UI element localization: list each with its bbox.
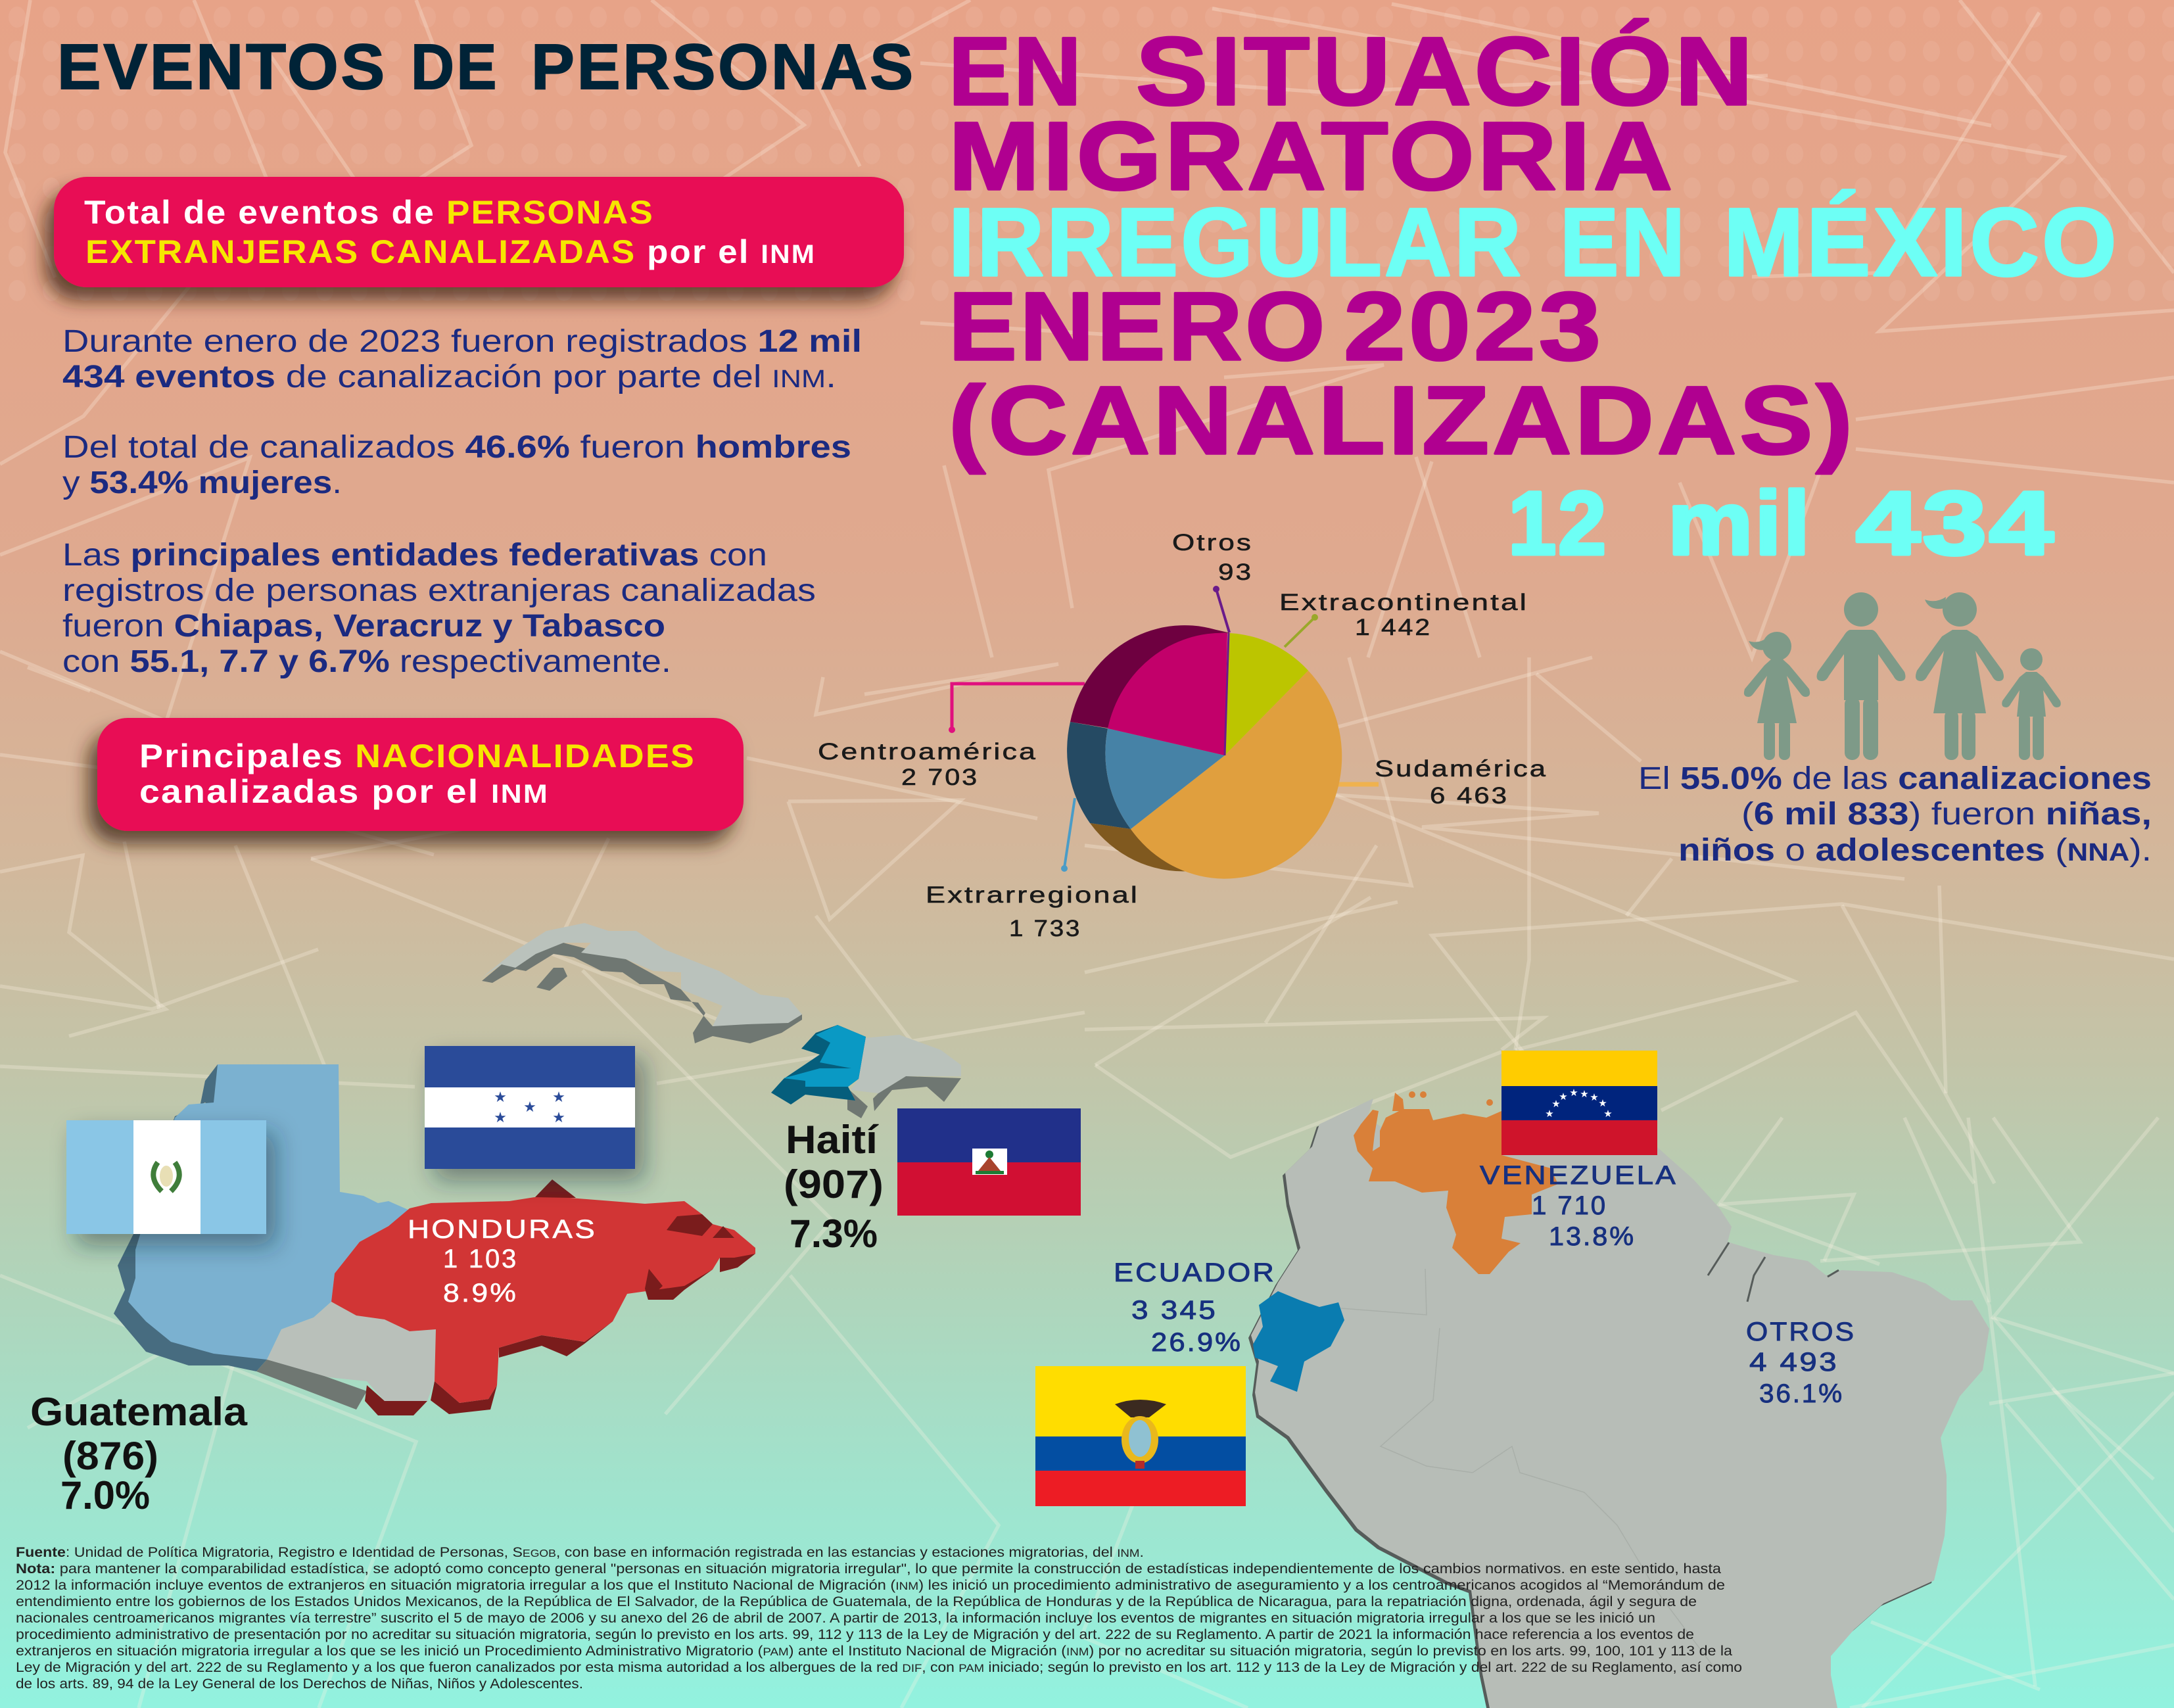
footnote: fuente y nota: Ley de Migración y del art. 222 de su Reglamento y a los que fueron canalizados por esta misma autoridad a los albergues de la red DIF, con PAM iniciado; según lo previsto en los art. 112 y 113 de la Ley de Migración y del art. 222 de su Reglamento, así como [16, 1660, 1742, 1675]
stars: ★ [494, 1089, 507, 1105]
title line: irregular en México: IRREGULAR [949, 189, 1524, 297]
label: Extracontinental: Extracontinental [1279, 590, 1528, 615]
leader lines [949, 586, 1379, 872]
label: Otros: OTROS [1746, 1317, 1856, 1346]
slice: Extracontinental [1225, 633, 1308, 755]
slice: Centroamérica [1108, 633, 1227, 755]
emblem: Ecuador [1115, 1400, 1166, 1469]
stars: ★ [1598, 1098, 1607, 1109]
label: Ecuador: ECUADOR [1114, 1258, 1276, 1287]
stars: ★ [1545, 1108, 1554, 1120]
text block: NNA: El 55.0% de las canalizaciones [1638, 761, 2152, 796]
pill background [54, 177, 904, 287]
label: Ecuador [1114, 1258, 1276, 1357]
title line: en situación [949, 18, 1756, 126]
paragraph: entidades federativas: con 55.1, 7.7 y 6.7% respectivamente. [62, 644, 671, 679]
map: El Salvador [256, 1302, 436, 1415]
label: Guatemala: Guatemala [30, 1390, 248, 1434]
flag: Honduras [425, 1046, 635, 1169]
label: Honduras: 1 103 [443, 1245, 518, 1273]
label: Venezuela: VENEZUELA [1480, 1161, 1678, 1190]
paragraph: registros: 434 eventos de canalización por parte del INM . [62, 360, 836, 394]
label: Haití: Haití [786, 1118, 879, 1162]
footnote: fuente y nota: nacionales centroamericanos migrantes vía terrestre” suscrito el 5 de mayo de 2006 y su anexo del 26 de abril de 2007. A partir de 2013, la información incluye los eventos de migrantes en situación migratoria irregular a los que se les inició un [16, 1611, 1655, 1626]
label: Centroamérica: 2 703 [901, 765, 979, 790]
slice: Sudamérica [1131, 671, 1342, 879]
map: Honduras [331, 1179, 755, 1414]
map: Venezuela [1354, 1091, 1558, 1274]
footnote: fuente y nota: extranjeros en situación migratoria irregular a los que se les inició un Procedimiento Administrativo Migratorio ( PAM) ante el Instituto Nacional de Migración ( INM) por no acreditar su situación migratoria, según lo previsto en los arts. 99, 100, 101 y 113 de la [16, 1644, 1732, 1659]
total figure: mil [1668, 473, 1812, 574]
footnote: fuente y nota: Nota: para mantener la comparabilidad estadística, se adoptó como concepto general "personas en situación migratoria irregular", lo que permite la construcción de estadísticas independientemente de los cambios normativos. en este sentido, hasta [16, 1561, 1721, 1577]
flag: Venezuela [1501, 1051, 1657, 1155]
panel: principales nacionalidades pill [97, 718, 744, 831]
paragraph: hombres y mujeres [62, 430, 851, 500]
label: Otros: Otros [1172, 530, 1253, 556]
label: Otros [1746, 1317, 1856, 1408]
text block: NNA: (6 mil 833 ) fueron niñas, [1741, 797, 2152, 832]
label: Haití: (907) [784, 1162, 884, 1206]
icon: woman [1916, 592, 2004, 760]
label: Ecuador: 3 345 [1131, 1296, 1217, 1325]
text block: resumen [62, 324, 862, 679]
stars: ★ [552, 1089, 565, 1105]
stars [1545, 1087, 1613, 1120]
title line: irregular en México: EN [1560, 189, 1688, 297]
footnote: fuente y nota: entendimiento entre los gobiernos de los Estados Unidos Mexicanos, de la República de El Salvador, de la República de Guatemala, de la República de Honduras y de la República de Nicaragua, para la repatriación digna, ordenada, ágil y segura de [16, 1594, 1697, 1609]
total figure [1508, 473, 2056, 574]
paragraph: entidades federativas: Las principales entidades federativas con [62, 538, 767, 573]
label: Otros: 4 493 [1749, 1348, 1839, 1377]
label: Extrarregional: Extrarregional [926, 882, 1139, 908]
label: Honduras: HONDURAS [408, 1215, 597, 1244]
label: Guatemala [30, 1390, 248, 1517]
footnote: fuente y nota: de los arts. 89, 94 de la Ley General de los Derechos de Niñas, Niños y Adolescentes. [16, 1676, 583, 1692]
icon: girl [1744, 632, 1810, 760]
stars: ★ [523, 1099, 536, 1115]
paragraph: registros: Durante enero de 2023 fueron registrados 12 mil [62, 324, 862, 359]
icon: family [1744, 592, 2061, 760]
map: Haiti [771, 1025, 866, 1104]
stars: ★ [1590, 1092, 1599, 1103]
label: Otros: 93 [1218, 559, 1253, 585]
pill line 1: Principales NACIONALIDADES [139, 738, 696, 774]
map: South America [1248, 1099, 1989, 1708]
flag: Guatemala [66, 1120, 266, 1234]
icon: man [1817, 592, 1905, 760]
label: Centroamérica: Centroamérica [818, 739, 1037, 765]
label: Venezuela: 13.8% [1549, 1222, 1636, 1251]
total figure: 434 [1856, 473, 2056, 574]
paragraph: entidades federativas: registros de personas extranjeras canalizadas [62, 573, 816, 608]
title line: en situación: SITUACIÓN [1136, 18, 1756, 126]
text block: NNA [1638, 761, 2152, 868]
icon: child [2002, 648, 2061, 760]
label: Extrarregional: 1 733 [1009, 916, 1081, 941]
stars [494, 1089, 565, 1126]
paragraph: hombres y mujeres: Del total de canalizados 46.6% fueron hombres [62, 430, 851, 465]
emblem: Haiti [972, 1149, 1007, 1175]
pie depth [1067, 625, 1231, 878]
title line: enero 2023: 2023 [1344, 273, 1604, 381]
label: Honduras: 8.9% [443, 1279, 518, 1308]
label: Otros: 36.1% [1759, 1379, 1844, 1408]
title line: canalizadas: (CANALIZADAS) [949, 367, 1856, 475]
label: Extracontinental: 1 442 [1355, 615, 1432, 640]
flag: Haiti [897, 1108, 1081, 1216]
pill line 2: canalizadas por el INM [139, 773, 549, 810]
footnote: fuente y nota [16, 1545, 1742, 1692]
label: Sudamérica [1375, 756, 1548, 809]
label: Guatemala: 7.0% [60, 1473, 150, 1517]
title line: en situación: EN [949, 18, 1084, 126]
label: Venezuela [1480, 1161, 1678, 1251]
title line: irregular en México: MÉXICO [1724, 189, 2119, 297]
paragraph: entidades federativas: fueron Chiapas, Veracruz y Tabasco [62, 609, 665, 644]
title: Eventos de personas [57, 31, 916, 103]
title: Eventos de personas: PERSONAS [531, 31, 916, 103]
title: Eventos de personas: DE [411, 31, 499, 103]
stars: ★ [1603, 1108, 1613, 1120]
title line: migratoria: MIGRATORIA [949, 103, 1676, 210]
title: Eventos de personas: EVENTOS [57, 31, 387, 103]
label: Sudamérica: Sudamérica [1375, 756, 1548, 782]
pill line 2: EXTRANJERAS CANALIZADAS por el INM [85, 233, 816, 270]
label: Honduras [408, 1215, 597, 1308]
stars: ★ [1559, 1091, 1568, 1103]
label: Ecuador: 26.9% [1151, 1328, 1242, 1357]
label: Extracontinental [1279, 590, 1528, 640]
slice: Otros [1225, 633, 1229, 755]
pill line 1: Total de eventos de PERSONAS [84, 194, 654, 231]
pill background [97, 718, 744, 831]
pie chart [818, 530, 1548, 941]
label: Venezuela: 1 710 [1532, 1191, 1607, 1220]
paragraph: hombres y mujeres: y 53.4% mujeres . [62, 465, 342, 500]
emblem: Guatemala [153, 1162, 179, 1191]
label: Guatemala: (876) [62, 1434, 158, 1478]
text block: NNA: niños o adolescentes (NNA ). [1678, 833, 2152, 868]
stars: ★ [552, 1109, 565, 1126]
total figure: 12 [1508, 473, 1608, 574]
title line: irregular en México [949, 189, 2119, 297]
label: Haití [784, 1118, 884, 1256]
label: Haití: 7.3% [790, 1212, 878, 1256]
stars: ★ [1569, 1087, 1578, 1099]
stars: ★ [1580, 1089, 1589, 1100]
label: Otros [1172, 530, 1253, 585]
paragraph: registros [62, 324, 862, 394]
footnote: fuente y nota: 2012 la información incluye eventos de extranjeros en situación migratoria irregular a los que el Instituto Nacional de Migración ( INM) les inició un procedimiento administrativo de aseguramiento y a los centroamericanos acogidos al “Memorándum de [16, 1578, 1725, 1593]
label: Sudamérica: 6 463 [1430, 783, 1509, 809]
label: Centroamérica [818, 739, 1037, 790]
stars: ★ [1551, 1099, 1561, 1110]
footnote: fuente y nota: procedimiento administrativo de presentación por no acreditar su situación migratoria, según lo previsto en los arts. 99, 112 y 113 de la Ley de Migración y del art. 222 de su Reglamento. A partir de 2021 la información hace referencia a los eventos de [16, 1627, 1694, 1642]
flag: Ecuador [1035, 1366, 1246, 1506]
map: Ecuador [1253, 1291, 1344, 1392]
map: Cuba [482, 923, 802, 1043]
paragraph: entidades federativas [62, 538, 816, 679]
slice: Extrarregional [1105, 728, 1225, 829]
map: Dominican Republic [847, 1035, 961, 1118]
map: Guatemala [114, 1064, 410, 1371]
title: en situación migratoria irregular [949, 18, 2119, 475]
stars: ★ [494, 1109, 507, 1126]
footnote: fuente y nota: Fuente : Unidad de Política Migratoria, Registro e Identidad de Personas, S EGOB, con base en información registrada en las estancias y estaciones migratorias, del INM. [16, 1545, 1144, 1560]
panel: total de eventos pill [54, 177, 904, 287]
title line: enero 2023 [949, 273, 1604, 381]
label: Extrarregional [926, 882, 1139, 941]
title line: enero 2023: ENERO [949, 273, 1328, 381]
